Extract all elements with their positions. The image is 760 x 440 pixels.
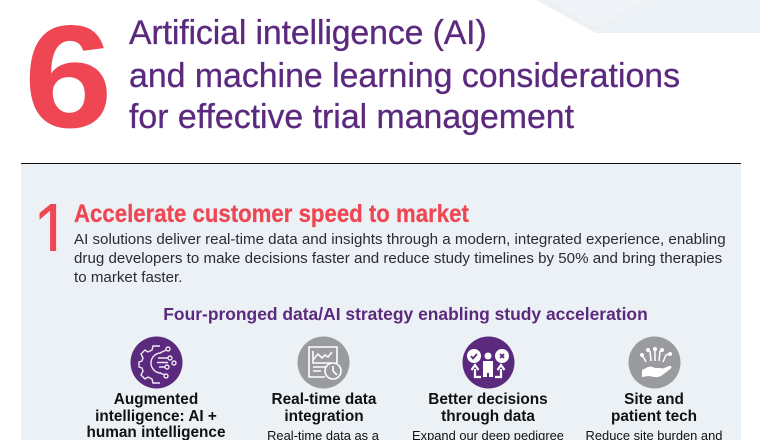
icon: augmented intelligence gear (130, 336, 182, 388)
section heading: Accelerate customer speed to market (74, 200, 469, 228)
title: and machine learning considerations (129, 57, 680, 95)
pillar: better decisions: through data (441, 408, 535, 424)
section description: to market faster. (74, 269, 182, 286)
pillar: better decisions (412, 391, 564, 440)
pillar: augmented intelligence (87, 391, 225, 440)
pillar: better decisions: Better decisions (428, 391, 548, 408)
pillar: site and patient tech (586, 391, 722, 440)
pillar: site and patient tech: Site and (624, 391, 684, 408)
section description (74, 231, 726, 286)
title (128, 14, 680, 136)
decorative corner graphic (536, 0, 760, 33)
section description: AI solutions deliver real-time data and insights through a modern, integrated experience, enabling (74, 231, 726, 248)
pillar: real-time data integration: integration (284, 408, 364, 424)
pillar: real-time data integration: Real-time data (272, 391, 376, 408)
strategy subheading: Four-pronged data/AI strategy enabling study acceleration (163, 304, 648, 324)
icon: better decisions (462, 336, 514, 388)
pillar: real-time data integration (267, 391, 379, 440)
section description: drug developers to make decisions faster and reduce study timelines by 50% and bring therapies (74, 250, 722, 267)
pillar: augmented intelligence: intelligence: AI + (95, 408, 217, 424)
icon: real-time data chart (298, 336, 350, 388)
icon: hand with tech (628, 336, 680, 388)
pillar: augmented intelligence: Augmented (114, 391, 198, 408)
pillar: site and patient tech: patient tech (611, 408, 697, 424)
title: for effective trial management (129, 98, 574, 136)
panel: section 1 (21, 163, 741, 440)
section number 1: 1 (32, 187, 70, 276)
title: Artificial intelligence (AI) (129, 14, 487, 52)
